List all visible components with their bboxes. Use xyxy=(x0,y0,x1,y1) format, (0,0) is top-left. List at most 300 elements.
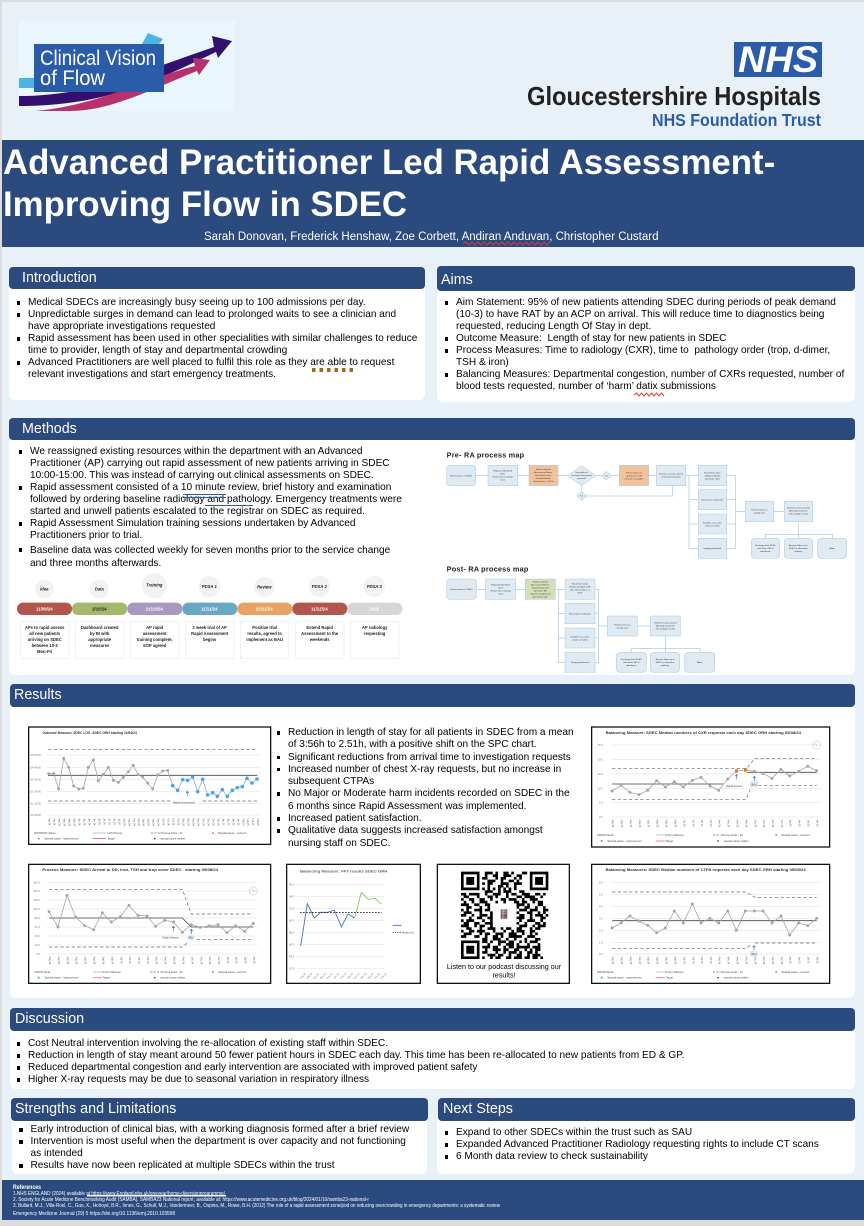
chart: balancing measure CTPA requests: 5.0 xyxy=(599,892,603,896)
chart: process measure arrival to order: Dec 24 xyxy=(208,957,210,965)
chart: balancing measure CTPA requests: Target xyxy=(666,976,673,980)
timeline xyxy=(17,573,402,658)
chart: process measure arrival to order: Sep 24 xyxy=(93,957,95,965)
chart: outcome measure SDEC LOS: 06:00:00 xyxy=(31,753,42,757)
chart: outcome measure SDEC LOS: Jul 24 xyxy=(102,818,104,825)
footer: references: 3. Bullard, M.J., Villa-Roel, C., Guo, X., Holroyd, B.R., Innes, G., Schull, M.J., Vandermeer, B., Ospina, M., Rowe, B.H. (2012) The role of a rapid assessment zone/pod on reducing overcrowding in emergency departments: a systematic review xyxy=(13,1203,500,1209)
chart: balancing measure FFT results: Balancing Measure: FFT results SDEC GRH xyxy=(300,869,388,873)
chart: balancing measure CTPA requests: Oct 24 xyxy=(691,957,694,964)
Pre-RA process map: escalated intervention xyxy=(571,474,593,477)
panel: methods xyxy=(9,418,855,675)
chart: balancing measure CXR requests: Special cause - improvement xyxy=(607,839,642,843)
chart: balancing measure CTPA requests: Nov 24 xyxy=(735,957,737,965)
Pre-RA process map: Arrange follow up in xyxy=(789,544,809,547)
chart: balancing measure CTPA requests: Aug 24 xyxy=(638,957,641,965)
chart: outcome measure SDEC LOS: Oct 24 xyxy=(167,818,170,826)
chart: process measure arrival to order: 140.0 xyxy=(33,889,41,893)
chart: process measure arrival to order: Jan 25 xyxy=(226,957,228,964)
chart: balancing measure CXR requests: 15.0 xyxy=(598,772,603,776)
timeline descriptions: arriving on SDEC xyxy=(28,637,62,642)
chart: balancing measure CXR requests: Oct 24 xyxy=(709,820,712,827)
chart: balancing measure CTPA requests: Sep 24 xyxy=(656,957,658,965)
chart: outcome measure SDEC LOS: Feb 25 xyxy=(246,818,248,826)
chart: process measure arrival to order: 40.0 xyxy=(35,934,40,938)
process maps xyxy=(446,451,847,673)
chart: process measure arrival to order: Process limits - 3σ xyxy=(161,970,183,974)
chart: balancing measure FFT results: Oct 24 xyxy=(353,972,361,980)
text: results bullets xyxy=(277,727,574,849)
chart: process measure arrival to order: 20.0 xyxy=(35,943,40,947)
footer: references xyxy=(2,1180,864,1220)
text: methods bullets: followed by ordering baseline radiology and pathology. Emergency treatments were xyxy=(30,494,402,505)
chart: balancing measure CTPA requests: Oct 24 xyxy=(682,957,685,964)
Pre-RA process map: Patient returns to xyxy=(626,471,643,474)
timeline stage headers: PDSA 3 xyxy=(367,584,382,589)
chart: process measure arrival to order: 80.0 xyxy=(35,916,40,920)
Post-RA process map: pathway xyxy=(661,664,670,667)
Pre-RA process map: and inform GP of xyxy=(757,547,774,550)
timeline date pills xyxy=(17,603,402,615)
chart: process measure arrival to order: Dec 24 xyxy=(190,957,192,965)
timeline stage headers: Idea xyxy=(40,586,49,591)
Pre-RA process map: Nurse/Tech takes xyxy=(704,471,721,474)
title xyxy=(3,143,775,224)
logo: Clinical Vision of Flow: of Flow xyxy=(40,67,106,90)
chart: balancing measure CXR requests: Dec 24 xyxy=(762,820,764,828)
chart: balancing measure CXR requests: Jan 25 xyxy=(798,820,800,827)
text: results bullets: nursing staff on SDEC. xyxy=(288,838,390,849)
Post-RA process map: Assessment Room. xyxy=(531,583,550,586)
chart: balancing measure CXR requests: Sep 24 xyxy=(664,820,666,828)
text: results bullets: Reduction in length of stay for all patients in SDEC from a mean xyxy=(288,727,574,738)
timeline descriptions: training complete, xyxy=(137,637,173,642)
logo: NHS Gloucestershire Hospitals xyxy=(527,39,822,130)
chart: balancing measure CXR requests: Sep 24 xyxy=(647,820,649,828)
Pre-RA process map: SDEC or alternative xyxy=(789,547,809,550)
chart: balancing measure CTPA requests: 0.0 xyxy=(599,952,603,956)
heading: Aims xyxy=(437,266,855,291)
chart: outcome measure SDEC LOS: special cause neither xyxy=(160,837,185,841)
Pre-RA process map: Patient sits in waiting xyxy=(493,476,513,479)
text: introduction bullets xyxy=(17,297,417,380)
chart: balancing measure CXR requests: special cause neither xyxy=(724,839,749,843)
text: aims bullets xyxy=(445,297,844,392)
text: aims bullets: blood tests requested, number of ‘harm’ datix submissions xyxy=(456,381,716,392)
logo: NHS Gloucestershire Hospitals: Gloucestershire Hospitals xyxy=(527,81,821,111)
chart: outcome measure SDEC LOS: Dec 24 xyxy=(202,818,204,826)
Pre-RA process map: Samples, e.g. urine, xyxy=(703,521,722,524)
chart: balancing measure CXR requests: Mean xyxy=(607,833,614,837)
chart: outcome measure SDEC LOS: May 24 xyxy=(73,818,75,827)
chart: outcome measure SDEC LOS: Feb 25 xyxy=(256,818,258,826)
chart: outcome measure SDEC LOS: Apr 24 xyxy=(53,818,56,826)
timeline descriptions: Positive trial xyxy=(252,625,277,630)
text: methods bullets: We reassigned existing resources within the department with an Advanced xyxy=(30,446,363,457)
chart: process measure arrival to order: BAU xyxy=(188,937,193,940)
text: aims bullets: TSH & iron) xyxy=(456,357,509,368)
chart: outcome measure SDEC LOS: Feb 25 xyxy=(251,818,253,826)
chart: balancing measure CXR requests: Process limits - 3σ xyxy=(721,833,743,837)
Pre-RA process map: stools are taken xyxy=(705,524,721,527)
chart: outcome measure SDEC LOS: Rapid Assessment xyxy=(173,800,195,804)
text: aims bullets: (10-3) to have RAT by an ACP on arrival. This will reduce time to diagnostics being xyxy=(456,309,824,320)
heading: Methods xyxy=(9,418,855,440)
Pre-RA process map: room xyxy=(500,479,505,482)
chart: outcome measure SDEC LOS: 01:12:00 xyxy=(31,801,42,805)
text: discussion bullets: Higher X-ray requests may be due to seasonal variation in respiratory illness xyxy=(28,1074,369,1085)
Pre-RA process map: with available results xyxy=(789,513,808,516)
chart: outcome measure SDEC LOS: Nov 24 xyxy=(197,818,199,826)
timeline descriptions: Assessment to the xyxy=(301,631,339,636)
chart: balancing measure CTPA requests: Jan 25 xyxy=(816,957,818,964)
Pre-RA process map: waiting area until xyxy=(626,474,642,477)
timeline date pills: 11/11/24 xyxy=(201,606,218,611)
text: methods bullets: Rapid assessment consisted of a 10 minute review, brief history and examination xyxy=(30,482,391,493)
chart: balancing measure CXR requests: Jan 25 xyxy=(789,820,791,827)
chart: outcome measure SDEC LOS: Mean xyxy=(49,831,56,835)
chart: process measure arrival to order: Sep 24 xyxy=(101,957,103,965)
chart: balancing measure CTPA requests: Dec 24 xyxy=(762,957,764,965)
text: introduction bullets: time to provider, length of stay and departmental crowding xyxy=(28,345,287,356)
chart: balancing measure CTPA requests: Process limits - 3σ xyxy=(721,970,743,974)
chart: balancing measure CTPA requests: Dec 24 xyxy=(780,957,782,965)
text: next steps bullets: Expand to other SDECs within the trust such as SAU xyxy=(456,1127,692,1138)
chart: balancing measure FFT results: 84.0 xyxy=(289,954,295,958)
chart: process measure arrival to order: Target xyxy=(103,976,110,980)
chart: process measure arrival to order: Nov 24 xyxy=(164,957,166,965)
chart: process measure arrival to order: 120.0 xyxy=(33,898,41,902)
Post-RA process map: SDEC or alternative xyxy=(656,661,675,664)
chart: balancing measure FFT results: Oct 24 xyxy=(313,972,320,980)
timeline descriptions: Rapid Assessment xyxy=(191,631,229,636)
chart: process measure arrival to order: Oct 24 xyxy=(146,957,149,964)
chart: balancing measure CXR requests: Oct 24 xyxy=(682,820,685,827)
Pre-RA process map: attendance xyxy=(760,550,771,553)
chart: balancing measure FFT results: Nov 24 xyxy=(320,973,327,980)
timeline descriptions: begins xyxy=(203,637,217,642)
chart: process measure arrival to order: 100.0 xyxy=(33,907,41,911)
chart: balancing measure CTPA requests: Special cause - improvement xyxy=(607,976,642,980)
footer: references: References xyxy=(13,1185,42,1191)
chart: process measure arrival to order: Sep 24 xyxy=(84,957,86,965)
timeline descriptions: SOP agreed xyxy=(143,643,167,648)
timeline descriptions: AP rapid xyxy=(146,625,164,630)
text: strengths bullets: as intended xyxy=(30,1148,83,1159)
text: methods bullets: Rapid Assessment Simulation training sessions undertaken by Advanced xyxy=(30,518,355,529)
timeline descriptions: Extend Rapid xyxy=(306,625,333,630)
text: aims bullets: requested, reducing Length Of Stay in dept. xyxy=(456,321,651,332)
Post-RA process map: with available results xyxy=(656,627,675,630)
timeline descriptions: appropriate xyxy=(88,637,112,642)
text: discussion bullets xyxy=(17,1038,684,1085)
chart: balancing measure CTPA requests: Dec 24 xyxy=(771,957,773,965)
logo: Clinical Vision of Flow: Clinical Vision xyxy=(40,47,156,70)
chart: outcome measure SDEC LOS: Jun 24 xyxy=(92,818,94,826)
chart: outcome measure SDEC LOS: Feb 25 xyxy=(241,818,243,826)
chart: outcome measure SDEC LOS: 03:36:00 xyxy=(31,777,42,781)
chart: process measure arrival to order: Oct 24 xyxy=(137,957,140,964)
panel: introduction xyxy=(9,267,425,400)
text: methods bullets: started and unwell patients escalated to the registrar on SDEC as required. xyxy=(30,506,365,517)
chart: outcome measure SDEC LOS: Aug 24 xyxy=(122,818,125,826)
Pre-RA process map: Clinician reviews patient xyxy=(787,507,810,510)
chart: process measure arrival to order: 0.0 xyxy=(36,952,40,956)
chart: process measure arrival to order: Special cause - concern xyxy=(218,970,247,974)
chart: balancing measure CTPA requests: Nov 24 xyxy=(727,957,729,965)
chart: balancing measure CXR requests: Target xyxy=(666,839,673,843)
Pre-RA process map: Nurse gives medication xyxy=(701,498,724,501)
Pre-RA process map: Imaging performed xyxy=(703,547,722,550)
Pre-RA process map: Assessment Room. xyxy=(534,471,553,474)
chart: outcome measure SDEC LOS: Special cause - improvement xyxy=(44,837,79,841)
text: next steps bullets: Expanded Advanced Practitioner Radiology requesting rights to include CT scans xyxy=(456,1139,819,1150)
chart: balancing measure FFT results: Jan 24 xyxy=(334,973,340,980)
chart: outcome measure SDEC LOS: May 24 xyxy=(63,818,65,827)
Post-RA process map: Samples, e.g. urine, xyxy=(571,635,590,638)
Pre-RA process map: clinician is available xyxy=(625,478,644,480)
chart: balancing measure CXR requests: Jan 25 xyxy=(816,820,818,827)
text: aims bullets: Process Measures: Time to radiology (CXR), time to pathology order (trop, d-dimer, xyxy=(456,345,830,356)
Post-RA process map: room xyxy=(498,592,503,595)
chart: balancing measure CTPA requests: Oct 24 xyxy=(709,957,712,964)
chart: balancing measure CTPA requests: Jan 25 xyxy=(789,957,791,964)
chart: balancing measure CTPA requests: Aug 24 xyxy=(629,957,632,965)
QR code: podcast xyxy=(437,864,569,983)
text: results bullets: No Major or Moderate harm incidents recorded on SDEC in the xyxy=(288,788,570,799)
chart: balancing measure CTPA requests: Nov 24 xyxy=(718,957,720,965)
Pre-RA process map: Clinician assesses patient xyxy=(659,473,684,476)
chart: outcome measure SDEC LOS: Oct 24 xyxy=(177,818,180,826)
chart: balancing measure CTPA requests: Aug 24 xyxy=(620,957,623,965)
text: strengths bullets xyxy=(19,1124,410,1171)
footer: references: Emergency Medicine Journal (29) 5 https://doi.org/10.1136/emj.2010.103598 xyxy=(13,1211,175,1217)
heading: Introduction xyxy=(9,267,425,289)
Pre-RA process map: Patient called to xyxy=(536,468,552,471)
text: methods bullets xyxy=(19,446,402,569)
chart: balancing measure CTPA requests: Mean xyxy=(607,970,614,974)
Pre-RA process map: waiting area xyxy=(754,512,766,515)
chart: outcome measure SDEC LOS: Outcome Measure: SDEC LOS -SDEC GRH starting 22/04/24 xyxy=(42,731,137,735)
timeline date pills: 2025 xyxy=(370,606,380,611)
chart: process measure arrival to order xyxy=(28,864,272,984)
chart: outcome measure SDEC LOS: Special cause - concern xyxy=(218,831,247,835)
heading: Strengths and Limitations xyxy=(11,1098,428,1121)
chart: balancing measure CTPA requests: Sep 24 xyxy=(647,957,649,965)
chart: outcome measure SDEC LOS: Jun 24 xyxy=(87,818,89,826)
title banner xyxy=(2,140,864,247)
chart: balancing measure CXR requests: Rapid Assess xyxy=(726,784,743,788)
chart: balancing measure CTPA requests: Balancing Measures: SDEC Median numbers of CTPA requests each day SDEC GRH starting 05/08/24 xyxy=(606,868,806,872)
chart: outcome measure SDEC LOS: Jan 25 xyxy=(221,818,223,826)
text: next steps bullets: 6 Month data review to check sustainability xyxy=(456,1151,648,1162)
Pre-RA process map: Registered by Ward xyxy=(493,470,513,473)
timeline date pills: 2/10/24 xyxy=(92,606,107,611)
Post-RA process map: Registered by Ward xyxy=(491,583,511,586)
chart: balancing measure FFT results: Nov 24 xyxy=(361,973,368,980)
Pre-RA process map: Yes xyxy=(605,475,608,477)
text: aims bullets: Aim Statement: 95% of new patients attending SDEC during periods of peak demand xyxy=(456,297,836,308)
chart: balancing measure FFT results: 90.0 xyxy=(289,918,295,922)
Pre-RA process map: Pre- RA process map xyxy=(447,451,525,460)
text: introduction bullets: Advanced Practitioners are well placed to fulfil this role as they are able to request xyxy=(28,357,394,368)
Pre-RA process map: Discharge from SDEC xyxy=(755,544,776,547)
heading: Next Steps xyxy=(438,1098,855,1121)
chart: balancing measure CTPA requests: Sep 24 xyxy=(664,957,666,965)
chart: balancing measure CXR requests: Dec 24 xyxy=(780,820,782,828)
chart: process measure arrival to order: 160.0 xyxy=(33,880,41,884)
heading: Next Steps: Next Steps xyxy=(443,1101,513,1117)
chart: balancing measure FFT results: Aug 24 xyxy=(299,972,307,980)
chart: balancing measure CXR requests: Dec 24 xyxy=(753,820,755,828)
text: discussion bullets: Reduced departmental congestion and early intervention are associated with improved patient safety xyxy=(28,1062,477,1073)
timeline stage headers xyxy=(35,573,385,598)
Post-RA process map: Patient returns to xyxy=(614,623,631,626)
chart: balancing measure FFT results: Sep 24 xyxy=(307,973,314,980)
text: results bullets: Significant reductions from arrival time to investigation requests xyxy=(288,752,571,763)
text: introduction bullets: have appropriate investigations requested xyxy=(28,321,215,332)
chart: balancing measure CXR requests: 25.0 xyxy=(598,743,603,747)
chart: outcome measure SDEC LOS: Dec 24 xyxy=(212,818,214,826)
chart: outcome measure SDEC LOS: Sep 24 xyxy=(147,818,149,826)
title: Improving Flow in SDEC xyxy=(3,185,407,224)
chart: balancing measure FFT results: Dec 24 xyxy=(368,973,375,980)
chart: process measure arrival to order: Nov 24 xyxy=(155,957,157,965)
text: introduction bullets: relevant investigations and start emergency treatments. xyxy=(28,369,276,380)
chart: balancing measure CTPA requests xyxy=(591,864,830,984)
heading: Methods: Methods xyxy=(22,421,77,437)
timeline descriptions: weekends xyxy=(309,637,330,642)
chart: process measure arrival to order: Aug 24 xyxy=(66,957,69,965)
Post-RA process map: Clerk. xyxy=(498,586,504,589)
chart: outcome measure SDEC LOS: Aug 24 xyxy=(137,818,140,826)
timeline stage headers: Review xyxy=(257,584,272,589)
chart: outcome measure SDEC LOS: Process limits - 3σ xyxy=(161,831,183,835)
chart: outcome measure SDEC LOS: Nov 24 xyxy=(187,818,189,826)
chart: balancing measure CXR requests: Oct 24 xyxy=(691,820,694,827)
chart: process measure arrival to order: Aug 24 xyxy=(48,957,51,965)
QR code: podcast: Listen to our podcast discussing our xyxy=(447,963,562,971)
Post-RA process map: Discharge from SDEC xyxy=(621,658,642,661)
chart: outcome measure SDEC LOS: Jul 24 xyxy=(117,818,119,825)
chart: outcome measure SDEC LOS: Sep 24 xyxy=(142,818,144,826)
text: introduction bullets: Medical SDECs are increasingly busy seeing up to 100 admissions per day. xyxy=(28,297,366,308)
Post-RA process map: requests imaging and xyxy=(530,592,551,595)
chart: outcome measure SDEC LOS: Jul 24 xyxy=(112,818,114,825)
chart: balancing measure CXR requests: Aug 24 xyxy=(620,820,623,828)
Post-RA process map: Clinician reviews patient xyxy=(654,621,677,624)
chart: outcome measure SDEC LOS: Jul 24 xyxy=(97,818,99,825)
Post-RA process map: Admit xyxy=(697,661,703,664)
timeline date pills: 21/10/24 xyxy=(146,606,163,611)
Post-RA process map: Nurse gives medication xyxy=(569,612,592,615)
text: aims bullets: Outcome Measure: Length of stay for new patients in SDEC xyxy=(456,333,726,344)
chart: balancing measure CTPA requests: 2.0 xyxy=(599,928,603,932)
chart: process measure arrival to order: Nov 24 xyxy=(181,957,183,965)
Pre-RA process map: observations +/- ECG xyxy=(533,480,554,483)
QR code: podcast: results! xyxy=(492,971,516,979)
text: methods bullets: Practitioners prior to trial. xyxy=(30,530,142,541)
chart: process measure arrival to order: Sep 24 xyxy=(110,957,112,965)
timeline descriptions: Dashboard created xyxy=(81,625,119,630)
chart: outcome measure SDEC LOS: Oct 24 xyxy=(172,818,175,826)
Post-RA process map xyxy=(447,565,715,672)
text: methods bullets: Practitioner (AP) carrying out rapid assessment of new patients arriving in SDEC xyxy=(30,458,390,469)
logo: Clinical Vision of Flow xyxy=(19,33,232,111)
chart: process measure arrival to order: Jan 25 xyxy=(235,957,237,964)
timeline descriptions: by BI with xyxy=(90,631,110,636)
heading: Strengths and Limitations: Strengths and Limitations xyxy=(15,1101,176,1117)
timeline descriptions: implement as BAU xyxy=(246,637,283,642)
chart: balancing measure CXR requests: Nov 24 xyxy=(727,820,729,828)
text: methods bullets: and three months afterwards. xyxy=(30,558,161,569)
text: introduction bullets: Unpredictable surges in demand can lead to prolonged waits to see a clinician and xyxy=(28,309,396,320)
chart: balancing measure FFT results: 96.0 xyxy=(289,882,295,886)
chart: balancing measure CXR requests: Nov 24 xyxy=(735,820,737,828)
Post-RA process map: Patient sits in waiting xyxy=(491,589,511,592)
chart: balancing measure FFT results: Jan 25 xyxy=(374,973,381,980)
Post-RA process map: attendance xyxy=(626,664,637,667)
chart: balancing measure CTPA requests: 3.0 xyxy=(599,916,603,920)
chart: balancing measure CTPA requests: Aug 24 xyxy=(611,957,614,965)
text: results bullets: subsequent CTPAs xyxy=(288,776,374,787)
chart: balancing measure CXR requests: 5.0 xyxy=(599,801,603,805)
panel: discussion xyxy=(10,1008,855,1089)
Post-RA process map: documents plan xyxy=(533,595,549,598)
Pre-RA process map: standard bloods, xyxy=(535,477,552,480)
timeline descriptions: all new patients xyxy=(29,631,61,636)
chart: outcome measure SDEC LOS: Dec 24 xyxy=(216,818,218,826)
text: aims bullets: Balancing Measures: Departmental congestion, number of CXRs requested, number of xyxy=(456,369,844,380)
heading: Results: Results xyxy=(14,687,62,703)
timeline descriptions: 2 week trial of AP xyxy=(193,625,227,630)
chart: balancing measure CXR requests: Jan 25 xyxy=(807,820,809,827)
Pre-RA process map: following treatment / xyxy=(789,510,808,513)
chart: outcome measure SDEC LOS: 00:00:00 xyxy=(31,813,42,817)
timeline descriptions: AP radiology xyxy=(362,625,388,630)
Post-RA process map: obs taken. AP xyxy=(534,589,547,592)
chart: outcome measure SDEC LOS: Aug 24 xyxy=(127,818,130,826)
timeline date pills: 22/11/24 xyxy=(256,606,273,611)
Pre-RA process map: Nurse/Tech takes xyxy=(535,474,552,477)
Post-RA process map: Imaging performed xyxy=(571,661,590,664)
Post-RA process map: Post- RA process map xyxy=(447,565,529,574)
chart: outcome measure SDEC LOS: Jan 25 xyxy=(236,818,238,826)
chart: balancing measure CTPA requests: 4.0 xyxy=(599,904,603,908)
panel: aims xyxy=(437,266,855,402)
chart: balancing measure CXR requests: Aug 24 xyxy=(629,820,632,828)
chart: outcome measure SDEC LOS: Sep 24 xyxy=(157,818,159,826)
heading: Aims: Aims xyxy=(441,272,473,288)
chart: process measure arrival to order: Mean xyxy=(44,970,51,974)
logo: NHS Gloucestershire Hospitals: NHS Foundation Trust xyxy=(652,110,821,130)
chart: balancing measure CTPA requests: Time in Minutes xyxy=(665,970,684,974)
timeline stage headers: Training xyxy=(146,583,163,588)
text: results bullets: Increased number of chest X-ray requests, but no increase in xyxy=(288,764,561,775)
chart: balancing measure CXR requests: Oct 24 xyxy=(700,820,703,827)
panel: results xyxy=(10,684,855,998)
chart: process measure arrival to order: special cause neither xyxy=(160,976,185,980)
authors: Sarah Donovan, Frederick Henshaw, Zoe Corbett, Andiran Anduvan, Christopher Custard xyxy=(204,231,658,243)
heading: Introduction: Introduction xyxy=(22,270,97,286)
Pre-RA process map: Admit xyxy=(829,547,835,550)
chart: balancing measure CTPA requests: 6.0 xyxy=(599,880,603,884)
chart: outcome measure SDEC LOS: Aug 24 xyxy=(132,818,135,826)
Post-RA process map: bloods specified in AP xyxy=(570,585,591,588)
chart: balancing measure CTPA requests: Sep 24 xyxy=(673,957,675,965)
logo: NHS Gloucestershire Hospitals: NHS xyxy=(738,39,818,80)
chart: outcome measure SDEC LOS: Dec 24 xyxy=(207,818,209,826)
chart: balancing measure CXR requests: 0.0 xyxy=(599,815,603,819)
